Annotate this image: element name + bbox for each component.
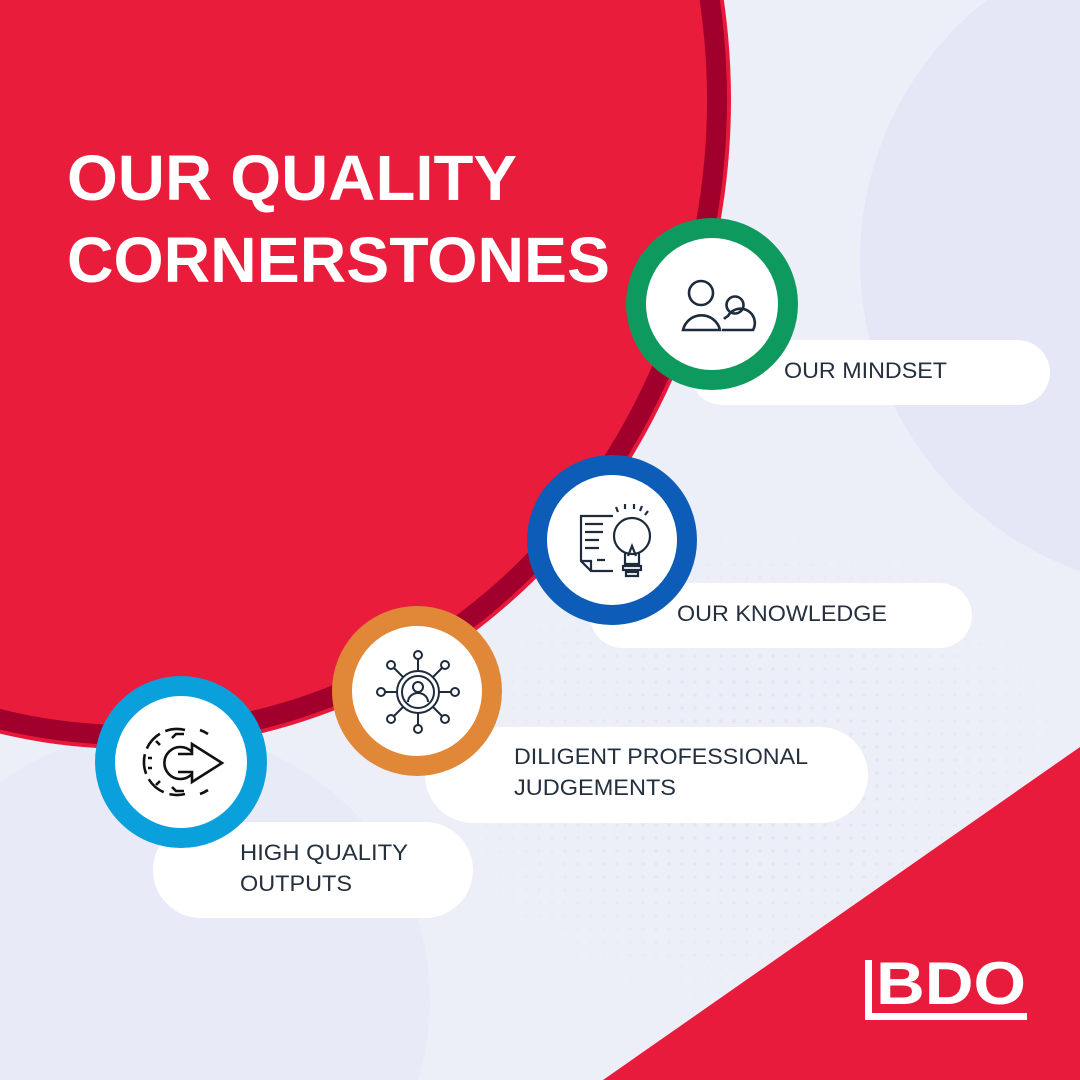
title: OUR QUALITY (67, 142, 517, 214)
background shapes (630, 668, 892, 878)
pill: our knowledge: OUR KNOWLEDGE (677, 601, 887, 626)
icon circle: knowledge (blue) (537, 465, 687, 615)
BDO logo: BDO (876, 950, 1026, 1017)
pill: our mindset (690, 340, 1050, 405)
pill: our mindset: OUR MINDSET (784, 358, 947, 383)
pill: high quality outputs (153, 822, 473, 918)
pill: high quality outputs: HIGH QUALITY (240, 840, 408, 865)
pill: diligent professional judgements: DILIGENT PROFESSIONAL (514, 744, 808, 769)
red triangle corner (603, 747, 1080, 1080)
pill: our knowledge (590, 583, 972, 648)
icon circle: outputs (light blue) (105, 686, 257, 838)
pill: diligent professional judgements (425, 727, 868, 823)
icon circle: mindset (green) (636, 228, 788, 380)
title: CORNERSTONES (67, 224, 610, 296)
pill: high quality outputs: OUTPUTS (240, 871, 352, 896)
title (67, 142, 610, 296)
pill: diligent professional judgements: JUDGEMENTS (514, 775, 676, 800)
big red circle (0, 0, 731, 749)
icon circle: judgements (orange) (342, 616, 492, 766)
